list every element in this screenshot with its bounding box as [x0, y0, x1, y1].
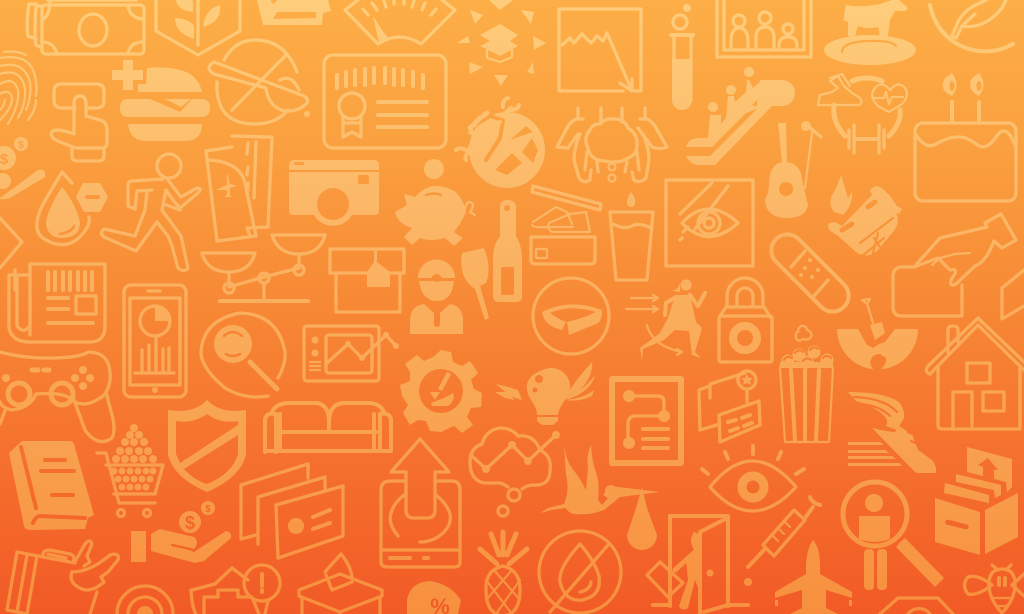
icon: airplane: [775, 540, 852, 614]
icon: balance scales: [202, 235, 325, 301]
icon: camera: [289, 160, 379, 226]
icon: package box: [330, 249, 404, 312]
icon: bandage: [765, 228, 855, 318]
icon: shopping cart with balls: [97, 424, 163, 516]
icon: doctor: [410, 260, 463, 334]
icon: house: [926, 318, 1024, 429]
icon: test tube: [671, 4, 693, 110]
icon: magnifier in circle: [201, 313, 285, 397]
icon: exploding box: [457, 0, 546, 86]
icon: plane tickets: [206, 136, 272, 241]
icon: thumbs up hand: [51, 84, 107, 161]
icon: ticket: [257, 0, 331, 25]
icon: overlapping id cards: [241, 464, 343, 558]
icon: winged lightbulb: [495, 362, 595, 425]
icon: water drop: [37, 172, 108, 245]
icon: runner: [102, 154, 200, 270]
icon: hands holding cloud: [557, 108, 667, 182]
icon: ballot box: [299, 554, 382, 614]
icon: cards with star: [699, 371, 760, 442]
icon: book: [9, 441, 94, 530]
icon: winged shoe: [848, 392, 936, 473]
icon: hand with coins bottom: $: [205, 504, 211, 515]
icon: partial hexagon box: [880, 598, 953, 614]
icon: target: [117, 586, 173, 614]
icon: hand in wallet: [893, 214, 1016, 316]
icon: hand with coins: $: [0, 151, 9, 168]
icon: crossed water drop: [539, 531, 621, 613]
icon: birthday cake: [915, 73, 1016, 201]
icon: hand with coins: $: [18, 140, 24, 151]
icon: percent tag: [407, 581, 461, 614]
icon: guitar and microphone: [765, 121, 821, 218]
icon: hand with coins bottom: [131, 501, 231, 563]
icon: television with chart: [304, 326, 399, 381]
icon: popcorn box: [780, 346, 834, 442]
icon: glass of water: [610, 192, 653, 280]
icon: escalator: [686, 67, 795, 165]
icon: toaster with flame: [828, 175, 902, 257]
icon: crossed pizza: [209, 40, 310, 124]
icon: woman runner: [626, 280, 705, 360]
icon: bee: [964, 565, 1024, 613]
icon: pineapple: [480, 532, 527, 614]
icon: shovel and half disc: [837, 299, 918, 371]
icon: man at door: [647, 516, 748, 614]
icon: hand with coins bottom: $: [185, 513, 195, 533]
icon: small popcorn puff: [796, 326, 812, 341]
icon: shoes on box: [531, 186, 601, 264]
icon: weighing scale: [345, 0, 455, 44]
icon: feather in circle: [930, 0, 1013, 51]
icon: shoe heart dumbbell: [818, 74, 907, 153]
icon: upload arrow tablet: [381, 439, 460, 567]
icon: cow on plate: [824, 0, 916, 65]
icon: eye with rays: [702, 446, 804, 511]
icon: newspaper: [9, 264, 105, 342]
icon: stork with bundle: [540, 445, 660, 550]
icon: thought cloud chart: [470, 428, 560, 516]
icon: padlock: [719, 278, 772, 362]
icon: shield with wheat: [156, 0, 240, 55]
icon: framed eye: [666, 180, 753, 266]
icon: winged glove: [7, 541, 118, 614]
icon: fingerprint: [0, 51, 36, 124]
icon: measuring belt in circle: [533, 278, 609, 354]
icon: shield with stripe: [168, 400, 246, 492]
icon: box with upward arrow: [935, 447, 1018, 555]
icon: person under magnifier: [843, 482, 944, 590]
icon: certificate: [324, 55, 446, 148]
icon: partial box at right edge: [1002, 270, 1024, 319]
icon: partial diamond at left edge: [0, 218, 22, 268]
icon: gear with microscope: [400, 350, 482, 433]
icon: burger with plus: [112, 60, 210, 141]
icon: family picture: [717, 0, 811, 57]
icon: shield with cross and alert: [191, 565, 280, 614]
icon: syringe: [744, 497, 820, 586]
icon: wine and bottle: [461, 200, 522, 320]
icon: sofa: [265, 403, 391, 452]
icon: document with circuit: [612, 379, 681, 463]
icon: game controller: [0, 352, 114, 442]
icon: hand with coins: [0, 137, 45, 199]
icon: piggy bank: [395, 159, 475, 246]
icon: prohibited wrench: [456, 98, 545, 188]
icon: banknotes: [27, 0, 144, 54]
icon: tablet with charts: [124, 285, 186, 397]
icon: falling chart: [559, 9, 641, 91]
